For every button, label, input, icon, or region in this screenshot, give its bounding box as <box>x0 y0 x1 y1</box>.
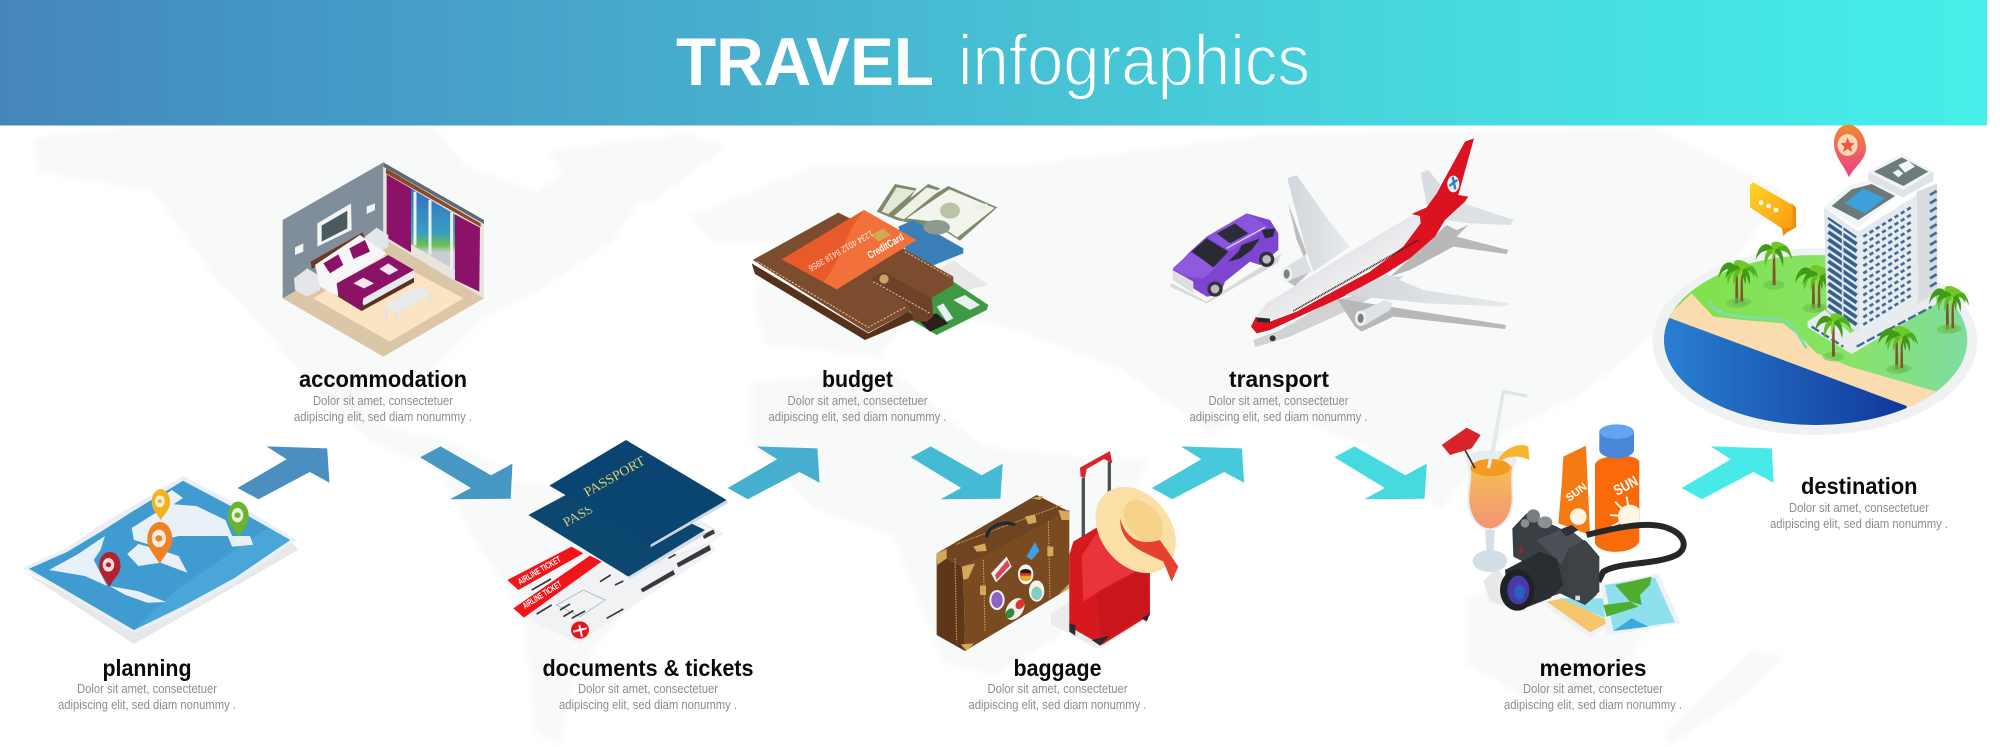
description: Dolor sit amet, consectetuer <box>1789 501 1929 515</box>
arrow: memories to destination <box>1682 446 1774 499</box>
step: baggage <box>968 655 1146 712</box>
step: destination <box>1770 473 1948 531</box>
description <box>1190 394 1368 424</box>
icon: destination pin <box>1834 125 1866 177</box>
icon: isometric hotel room <box>283 162 484 357</box>
description: Dolor sit amet, consectetuer <box>788 394 928 408</box>
description <box>1504 682 1682 712</box>
icon: yellow pin <box>152 489 170 520</box>
description <box>58 682 236 712</box>
description <box>768 394 946 424</box>
description: adipiscing elit, sed diam nonummy . <box>559 698 737 712</box>
text: airline ticket lower: AIRLINE TICKET <box>521 579 564 611</box>
description <box>559 682 737 712</box>
description: Dolor sit amet, consectetuer <box>313 394 453 408</box>
hotel building <box>1808 153 1937 354</box>
island <box>1660 253 1973 430</box>
icon: car <box>1170 213 1282 303</box>
icon: red pin <box>99 552 121 587</box>
heading: documents & tickets <box>542 655 754 681</box>
passport front cover <box>549 440 728 547</box>
icon: beach resort island with hotel <box>1653 125 1977 435</box>
heading: budget <box>822 366 893 392</box>
heading: memories <box>1540 655 1646 681</box>
text: credit card: CreditCard <box>866 231 906 262</box>
heading: planning <box>102 655 192 681</box>
text: passport lower: PASS <box>560 501 595 530</box>
icon: chat bubble <box>1750 182 1796 236</box>
description: adipiscing elit, sed diam nonummy . <box>294 410 472 424</box>
icon: wallet with cards and cash <box>752 184 997 340</box>
arrow: transport to memories <box>1334 446 1427 499</box>
heading: destination <box>1801 473 1918 499</box>
icon: cocktail, sunscreen and camera <box>1442 392 1684 638</box>
icon: purple car and red airplane <box>1170 138 1514 347</box>
description <box>294 394 472 424</box>
text: passport: PASSPORT <box>581 452 648 500</box>
header banner <box>0 0 1987 126</box>
description: Dolor sit amet, consectetuer <box>578 682 718 696</box>
arrow: baggage to transport <box>1152 446 1244 499</box>
arrow: budget to baggage <box>911 446 1003 499</box>
description: Dolor sit amet, consectetuer <box>77 682 217 696</box>
description: adipiscing elit, sed diam nonummy . <box>1504 698 1682 712</box>
text: card number: 1234 4012 8418 3956 <box>807 228 875 273</box>
arrow: planning to accommodation <box>237 446 329 499</box>
icon: green pin <box>228 502 249 537</box>
heading: transport <box>1229 366 1329 392</box>
step: budget <box>768 366 946 424</box>
icon: airplane <box>1251 138 1514 347</box>
icon: passports and airline tickets <box>507 440 728 643</box>
step: transport <box>1190 366 1368 424</box>
arrow: documents to budget <box>728 446 820 499</box>
description <box>968 682 1146 712</box>
step: planning <box>58 655 236 712</box>
arrow: accommodation to documents <box>420 446 512 499</box>
description: adipiscing elit, sed diam nonummy . <box>58 698 236 712</box>
text: sun on bottle: SUN <box>1611 473 1641 500</box>
icon: luggage with hat <box>937 451 1192 651</box>
step: accommodation <box>294 366 472 424</box>
description <box>1770 501 1948 531</box>
heading: accommodation <box>299 366 467 392</box>
text: airline ticket: AIRLINE TICKET <box>516 554 563 587</box>
description: adipiscing elit, sed diam nonummy . <box>768 410 946 424</box>
step: documents & tickets <box>542 655 754 712</box>
arrows <box>237 446 1774 499</box>
step: memories <box>1504 655 1682 712</box>
description: adipiscing elit, sed diam nonummy . <box>1190 410 1368 424</box>
title <box>676 22 1310 101</box>
description: Dolor sit amet, consectetuer <box>1208 394 1348 408</box>
description: Dolor sit amet, consectetuer <box>1523 682 1663 696</box>
description: Dolor sit amet, consectetuer <box>988 682 1128 696</box>
icon: folded map with pins <box>21 476 298 644</box>
text: sun on tube: SUN <box>1564 481 1590 504</box>
title: infographics <box>958 22 1310 101</box>
description: adipiscing elit, sed diam nonummy . <box>1770 517 1948 531</box>
description: adipiscing elit, sed diam nonummy . <box>968 698 1146 712</box>
title: TRAVEL <box>676 24 934 100</box>
world map background <box>32 125 1785 746</box>
heading: baggage <box>1014 655 1102 681</box>
icon: orange pin <box>147 522 172 564</box>
